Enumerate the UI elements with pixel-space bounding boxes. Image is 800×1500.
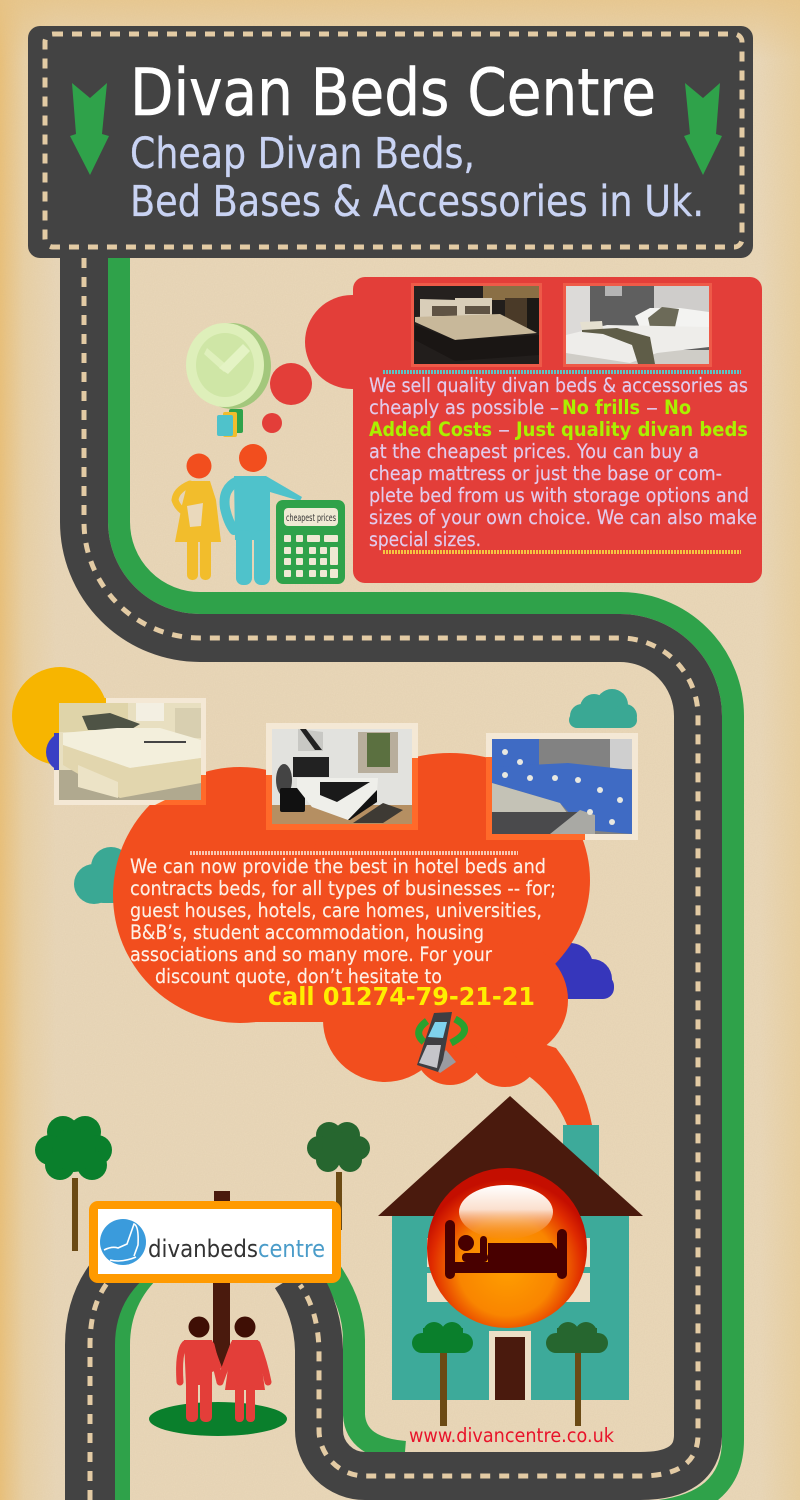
- decorative rule: yellow dotted: [383, 550, 741, 554]
- icon: glossy bed orb: [427, 1168, 587, 1328]
- panel: orange speech cloud: [54, 698, 638, 1125]
- website url: www.divancentre.co.uk: [409, 1424, 615, 1447]
- building: house: [378, 1096, 643, 1400]
- text block: hotel beds copy: guest houses, hotels, care homes, universities,: [130, 899, 542, 922]
- text block: intro copy: –: [498, 418, 510, 441]
- subtitle line one: Cheap Divan Beds,: [130, 129, 475, 179]
- icon: wall clock: [186, 323, 271, 409]
- sign: divanbeds centre logo board: [89, 1201, 341, 1283]
- text block: intro copy: special sizes.: [369, 528, 481, 551]
- figure: man in teal: [225, 444, 302, 585]
- title: Divan Beds Centre: [130, 56, 656, 131]
- road: upper winding road with green verge: [84, 250, 733, 1500]
- bed pictogram: [445, 1220, 567, 1279]
- icon: calculator: [276, 500, 345, 584]
- chimney: [563, 1125, 599, 1185]
- icon: teal cloud left: [74, 847, 140, 904]
- calculator label: cheapest prices: [286, 513, 336, 524]
- icon: teal cloud top right: [569, 689, 637, 728]
- icon: blue circle: [46, 732, 86, 772]
- text block: intro copy: at the cheapest prices. You can buy a: [369, 440, 699, 463]
- text block: intro copy: No frills: [562, 396, 640, 419]
- door: [489, 1331, 531, 1400]
- photo: cream divan with drawers: [54, 698, 206, 805]
- icon: left down arrow: [70, 83, 109, 175]
- text block: hotel beds copy: B&B’s, student accommodation, housing: [130, 921, 484, 944]
- tree: centre background tree: [307, 1122, 370, 1230]
- text block: intro copy: plete bed from us with storage options and: [369, 484, 749, 507]
- house body: [392, 1216, 629, 1400]
- tree: left background tree: [35, 1116, 112, 1251]
- phone number call to action: call 01274-79-21-21: [268, 982, 535, 1011]
- panel: red intro speech bubble: [262, 277, 762, 583]
- icon: yellow sun circle: [12, 667, 108, 765]
- text block: intro copy: Just quality divan beds: [514, 418, 748, 441]
- photo: blue football bed: [486, 733, 638, 840]
- text block: intro copy: –: [646, 396, 658, 419]
- text block: hotel beds copy: We can now provide the best in hotel beds and: [130, 855, 546, 878]
- tree: house left tree: [412, 1322, 473, 1426]
- figure: woman in yellow: [175, 454, 221, 580]
- icon: blue cloud right: [540, 943, 614, 999]
- tree: house right tree: [546, 1322, 608, 1426]
- windows: [427, 1238, 590, 1302]
- icon: small coloured cards: [217, 409, 243, 437]
- text block: intro copy: cheaply as possible –: [369, 396, 559, 419]
- text block: intro copy: [369, 374, 757, 551]
- figure: couple holding hands: [180, 1316, 268, 1422]
- ground ellipse under couple: [149, 1402, 287, 1436]
- decorative rule: teal dotted: [383, 370, 741, 374]
- text block: intro copy: cheap mattress or just the base or com-: [369, 462, 722, 485]
- text block: intro copy: sizes of your own choice. We can also make: [369, 506, 757, 529]
- logo mark: [100, 1219, 146, 1265]
- icon: cordless phone: [417, 1012, 465, 1073]
- photo: dark leather bed: [411, 283, 542, 367]
- text block: hotel beds copy: [130, 855, 556, 988]
- logo wordmark accent: centre: [258, 1235, 325, 1263]
- text block: intro copy: Added Costs: [369, 418, 492, 441]
- calculator buttons: [284, 535, 338, 578]
- text block: intro copy: We sell quality divan beds & accessories as: [369, 374, 748, 397]
- decorative rule: pale dotted: [190, 851, 518, 855]
- photo: white bed with throw: [563, 283, 712, 367]
- text block: intro copy: No: [664, 396, 691, 419]
- text block: hotel beds copy: associations and so many more. For your: [130, 943, 493, 966]
- text block: hotel beds copy: discount quote, don’t hesitate to: [155, 965, 442, 988]
- photo: white room with black bed: [266, 723, 418, 830]
- icon: right down arrow: [684, 83, 722, 175]
- panel: header sign: [28, 26, 753, 258]
- roof: [378, 1096, 643, 1216]
- sign post: [213, 1191, 230, 1368]
- subtitle line two: Bed Bases & Accessories in Uk.: [130, 177, 704, 227]
- text block: hotel beds copy: contracts beds, for all types of businesses -- for;: [130, 877, 556, 900]
- road: lower left road: [90, 1262, 155, 1500]
- logo wordmark: divanbeds: [148, 1235, 258, 1263]
